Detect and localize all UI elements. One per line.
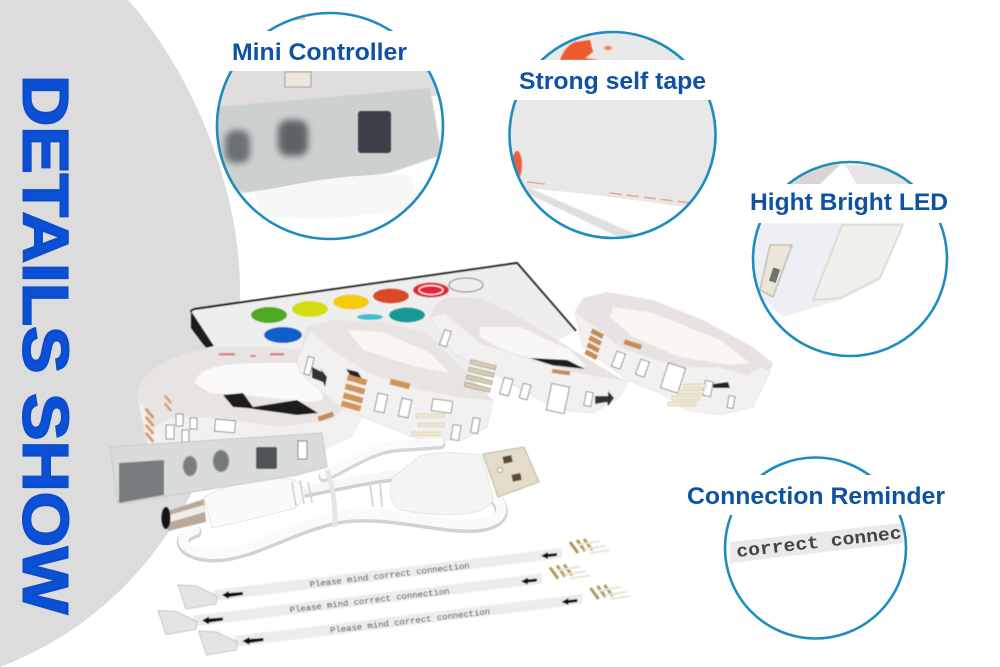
DC jack barrel — [162, 499, 206, 531]
USB cable and plugs — [162, 442, 539, 556]
ring — [753, 162, 947, 356]
ring — [725, 458, 906, 638]
gray background shape — [0, 0, 240, 667]
callout: Hight Bright LED — [745, 162, 953, 356]
label: Hight Bright LED — [750, 189, 948, 216]
USB metal plug — [483, 447, 539, 497]
flat cable 2: Please mind correct connection — [289, 586, 450, 615]
connector pins — [464, 360, 496, 392]
LED strip coil: left — [137, 347, 362, 452]
LED strip coil: centre — [297, 320, 493, 441]
label band — [682, 475, 950, 515]
LED strip coil: far right — [575, 292, 773, 415]
title: DETAILS SHOW: DETAILS SHOW — [10, 75, 82, 615]
flat cable 3 — [198, 585, 630, 655]
label: Strong self tape — [519, 68, 706, 95]
remote control — [191, 263, 576, 400]
LED strip coil: centre right — [430, 297, 628, 414]
remote buttons — [251, 278, 483, 343]
connector pins — [668, 384, 706, 406]
ring — [217, 13, 443, 239]
label band — [222, 31, 438, 71]
label band — [745, 184, 953, 223]
callout: Mini Controller — [217, 13, 443, 239]
USB white body — [390, 453, 493, 514]
label: Connection Reminder — [687, 483, 945, 510]
white cable loop — [183, 442, 501, 556]
label band — [512, 60, 712, 100]
flat cable 1: Please mind correct connection — [309, 561, 470, 590]
mini controller — [110, 433, 327, 504]
label: Mini Controller — [232, 39, 407, 66]
connector pins — [412, 414, 444, 436]
ring — [510, 32, 716, 238]
callout: Connection Reminder — [682, 457, 950, 638]
flat cable 2 — [158, 564, 590, 634]
flat cable 1 — [178, 539, 610, 609]
flat cable 3: Please mind correct connection — [330, 607, 491, 636]
callout: Strong self tape — [509, 32, 716, 238]
DC jack white body — [204, 478, 305, 528]
callout: Connection Reminder: correct connect — [735, 523, 915, 563]
